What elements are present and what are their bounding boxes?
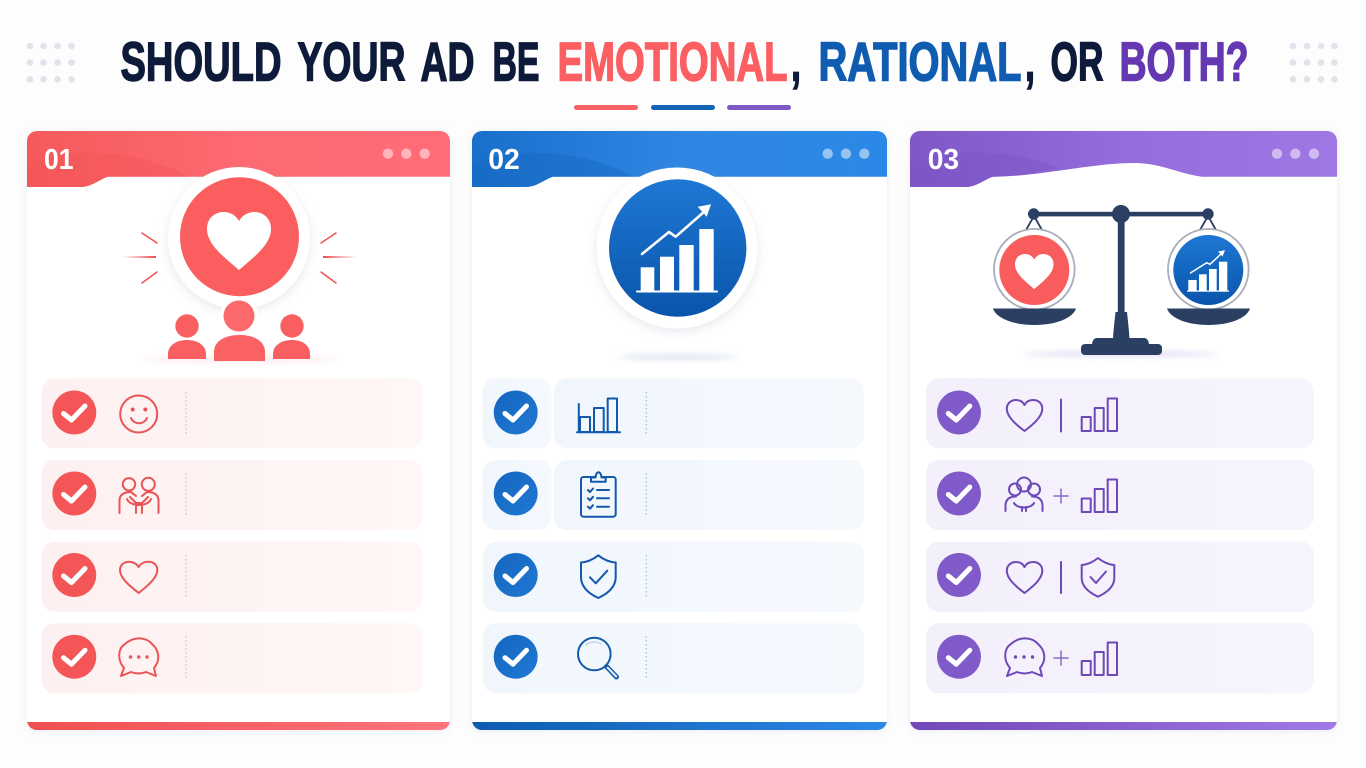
decorative dots: left xyxy=(27,43,75,83)
icon: growth chart medallion xyxy=(596,168,758,360)
row: people hugging xyxy=(42,460,422,530)
header band: both xyxy=(910,131,1337,187)
number badge 01: 01 xyxy=(44,144,74,176)
header dots xyxy=(1272,148,1319,159)
decorative dots: right xyxy=(1290,43,1338,83)
title: , xyxy=(1025,30,1035,92)
row: checklist clipboard xyxy=(482,460,864,530)
header band: rational xyxy=(472,131,887,187)
bottom accent bar xyxy=(27,722,450,730)
panel: rational xyxy=(472,131,887,730)
number badge 03: 03 xyxy=(928,144,959,176)
title: EMOTIONAL xyxy=(558,30,788,92)
row: magnifier xyxy=(483,623,864,693)
icon: heart medallion with radiating lines and audience xyxy=(122,167,357,362)
title: YOUR xyxy=(298,30,406,92)
bottom accent bar xyxy=(910,722,1337,730)
title: BE xyxy=(492,30,540,92)
row: speech plus bars xyxy=(926,623,1314,693)
panel: emotional xyxy=(27,131,450,730)
title: AD xyxy=(420,30,474,92)
title: SHOULD xyxy=(120,30,282,92)
title: RATIONAL xyxy=(818,30,1022,92)
row: heart or shield xyxy=(926,542,1314,612)
title xyxy=(120,30,1248,92)
row: bar chart xyxy=(482,378,864,448)
title: , xyxy=(791,30,801,92)
title: BOTH? xyxy=(1120,30,1248,92)
icon: balance scale xyxy=(993,205,1250,357)
row: speech bubble xyxy=(42,623,422,693)
bottom accent bar xyxy=(472,722,887,730)
row: people plus bars xyxy=(926,460,1314,530)
row: smile xyxy=(42,378,422,448)
header band: emotional xyxy=(27,131,450,187)
row: heart xyxy=(42,542,422,612)
row: heart or bars xyxy=(926,378,1314,448)
title underline accents xyxy=(574,105,791,110)
number badge 02: 02 xyxy=(488,144,520,176)
title: OR xyxy=(1050,30,1104,92)
header dots xyxy=(383,148,430,159)
panel: both xyxy=(910,131,1337,730)
row: shield xyxy=(483,542,864,612)
header dots xyxy=(822,148,870,159)
